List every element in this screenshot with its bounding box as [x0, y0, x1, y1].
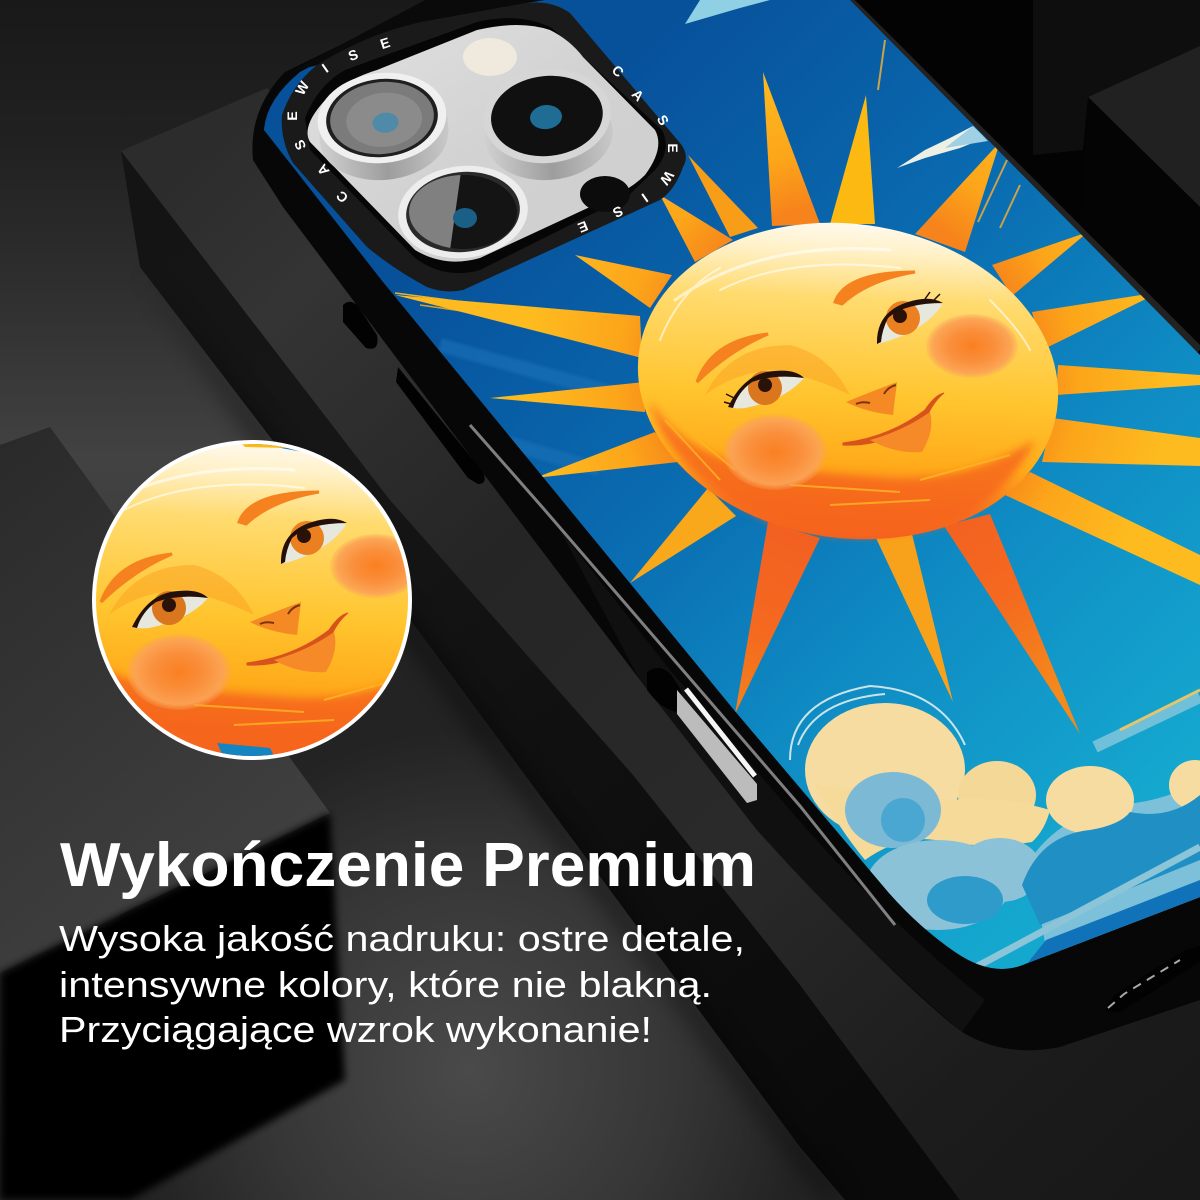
right cheek	[926, 314, 1018, 378]
small clouds	[685, 0, 770, 24]
camera island	[282, 0, 686, 291]
nose	[846, 382, 897, 415]
painted back panel	[250, 0, 1200, 980]
branding left: W	[292, 78, 313, 98]
branding right: W	[656, 168, 677, 189]
microphone	[580, 176, 630, 212]
charging port	[1106, 946, 1200, 1012]
title: Wykończenie Premium	[60, 831, 756, 900]
top right dark blocks	[820, 0, 1200, 420]
lens main	[478, 63, 617, 186]
branding left: S	[346, 46, 360, 64]
sun face	[638, 222, 1058, 543]
brush strokes	[395, 40, 1020, 470]
island ring	[282, 2, 686, 291]
main block dark side	[121, 151, 960, 1200]
branding right: S	[610, 203, 626, 221]
lens telephoto	[398, 166, 528, 258]
branding left: I	[319, 60, 331, 76]
rim highlight	[470, 425, 895, 925]
branding right: I	[639, 190, 651, 206]
low block	[0, 427, 345, 1200]
branding right	[576, 62, 681, 236]
branding left	[284, 34, 392, 206]
clouds	[790, 686, 1200, 975]
rim top cover	[290, 0, 545, 72]
branding right: E	[576, 218, 590, 236]
description text: Przyciągające wzrok wykonanie!	[59, 1009, 652, 1050]
left eyebrow	[697, 334, 768, 382]
description text	[59, 918, 745, 1050]
mouth	[843, 393, 944, 445]
branding left: E	[284, 111, 300, 121]
sun lower streaks	[665, 420, 1010, 505]
right eye	[877, 292, 943, 344]
sun rays	[395, 72, 1200, 734]
branding left: C	[333, 188, 351, 206]
branding left: E	[378, 34, 392, 52]
clear window	[308, 25, 658, 262]
branding right: S	[654, 112, 672, 128]
side buttons	[343, 302, 757, 803]
right eyebrow	[835, 272, 915, 304]
sun brush marks	[660, 249, 1030, 350]
detail magnifier circle	[92, 440, 412, 760]
branding right: C	[609, 62, 627, 80]
branding right: A	[629, 86, 647, 104]
branding right: E	[665, 143, 681, 153]
phone case body	[252, 0, 1200, 1050]
case side shade	[560, 530, 985, 1032]
lens ultra wide	[313, 66, 453, 186]
branding left: S	[291, 137, 309, 153]
flash	[463, 38, 517, 76]
island inner band	[305, 18, 666, 273]
branding left: A	[314, 161, 332, 179]
left cheek	[723, 414, 827, 490]
description text: Wysoka jakość nadruku: ostre detale,	[59, 918, 745, 959]
left eye	[724, 371, 804, 408]
case top right rim	[850, 0, 1200, 350]
eye shading	[705, 345, 850, 395]
description text: intensywne kolory, które nie blakną.	[59, 964, 712, 1005]
phone	[250, 0, 1200, 1050]
